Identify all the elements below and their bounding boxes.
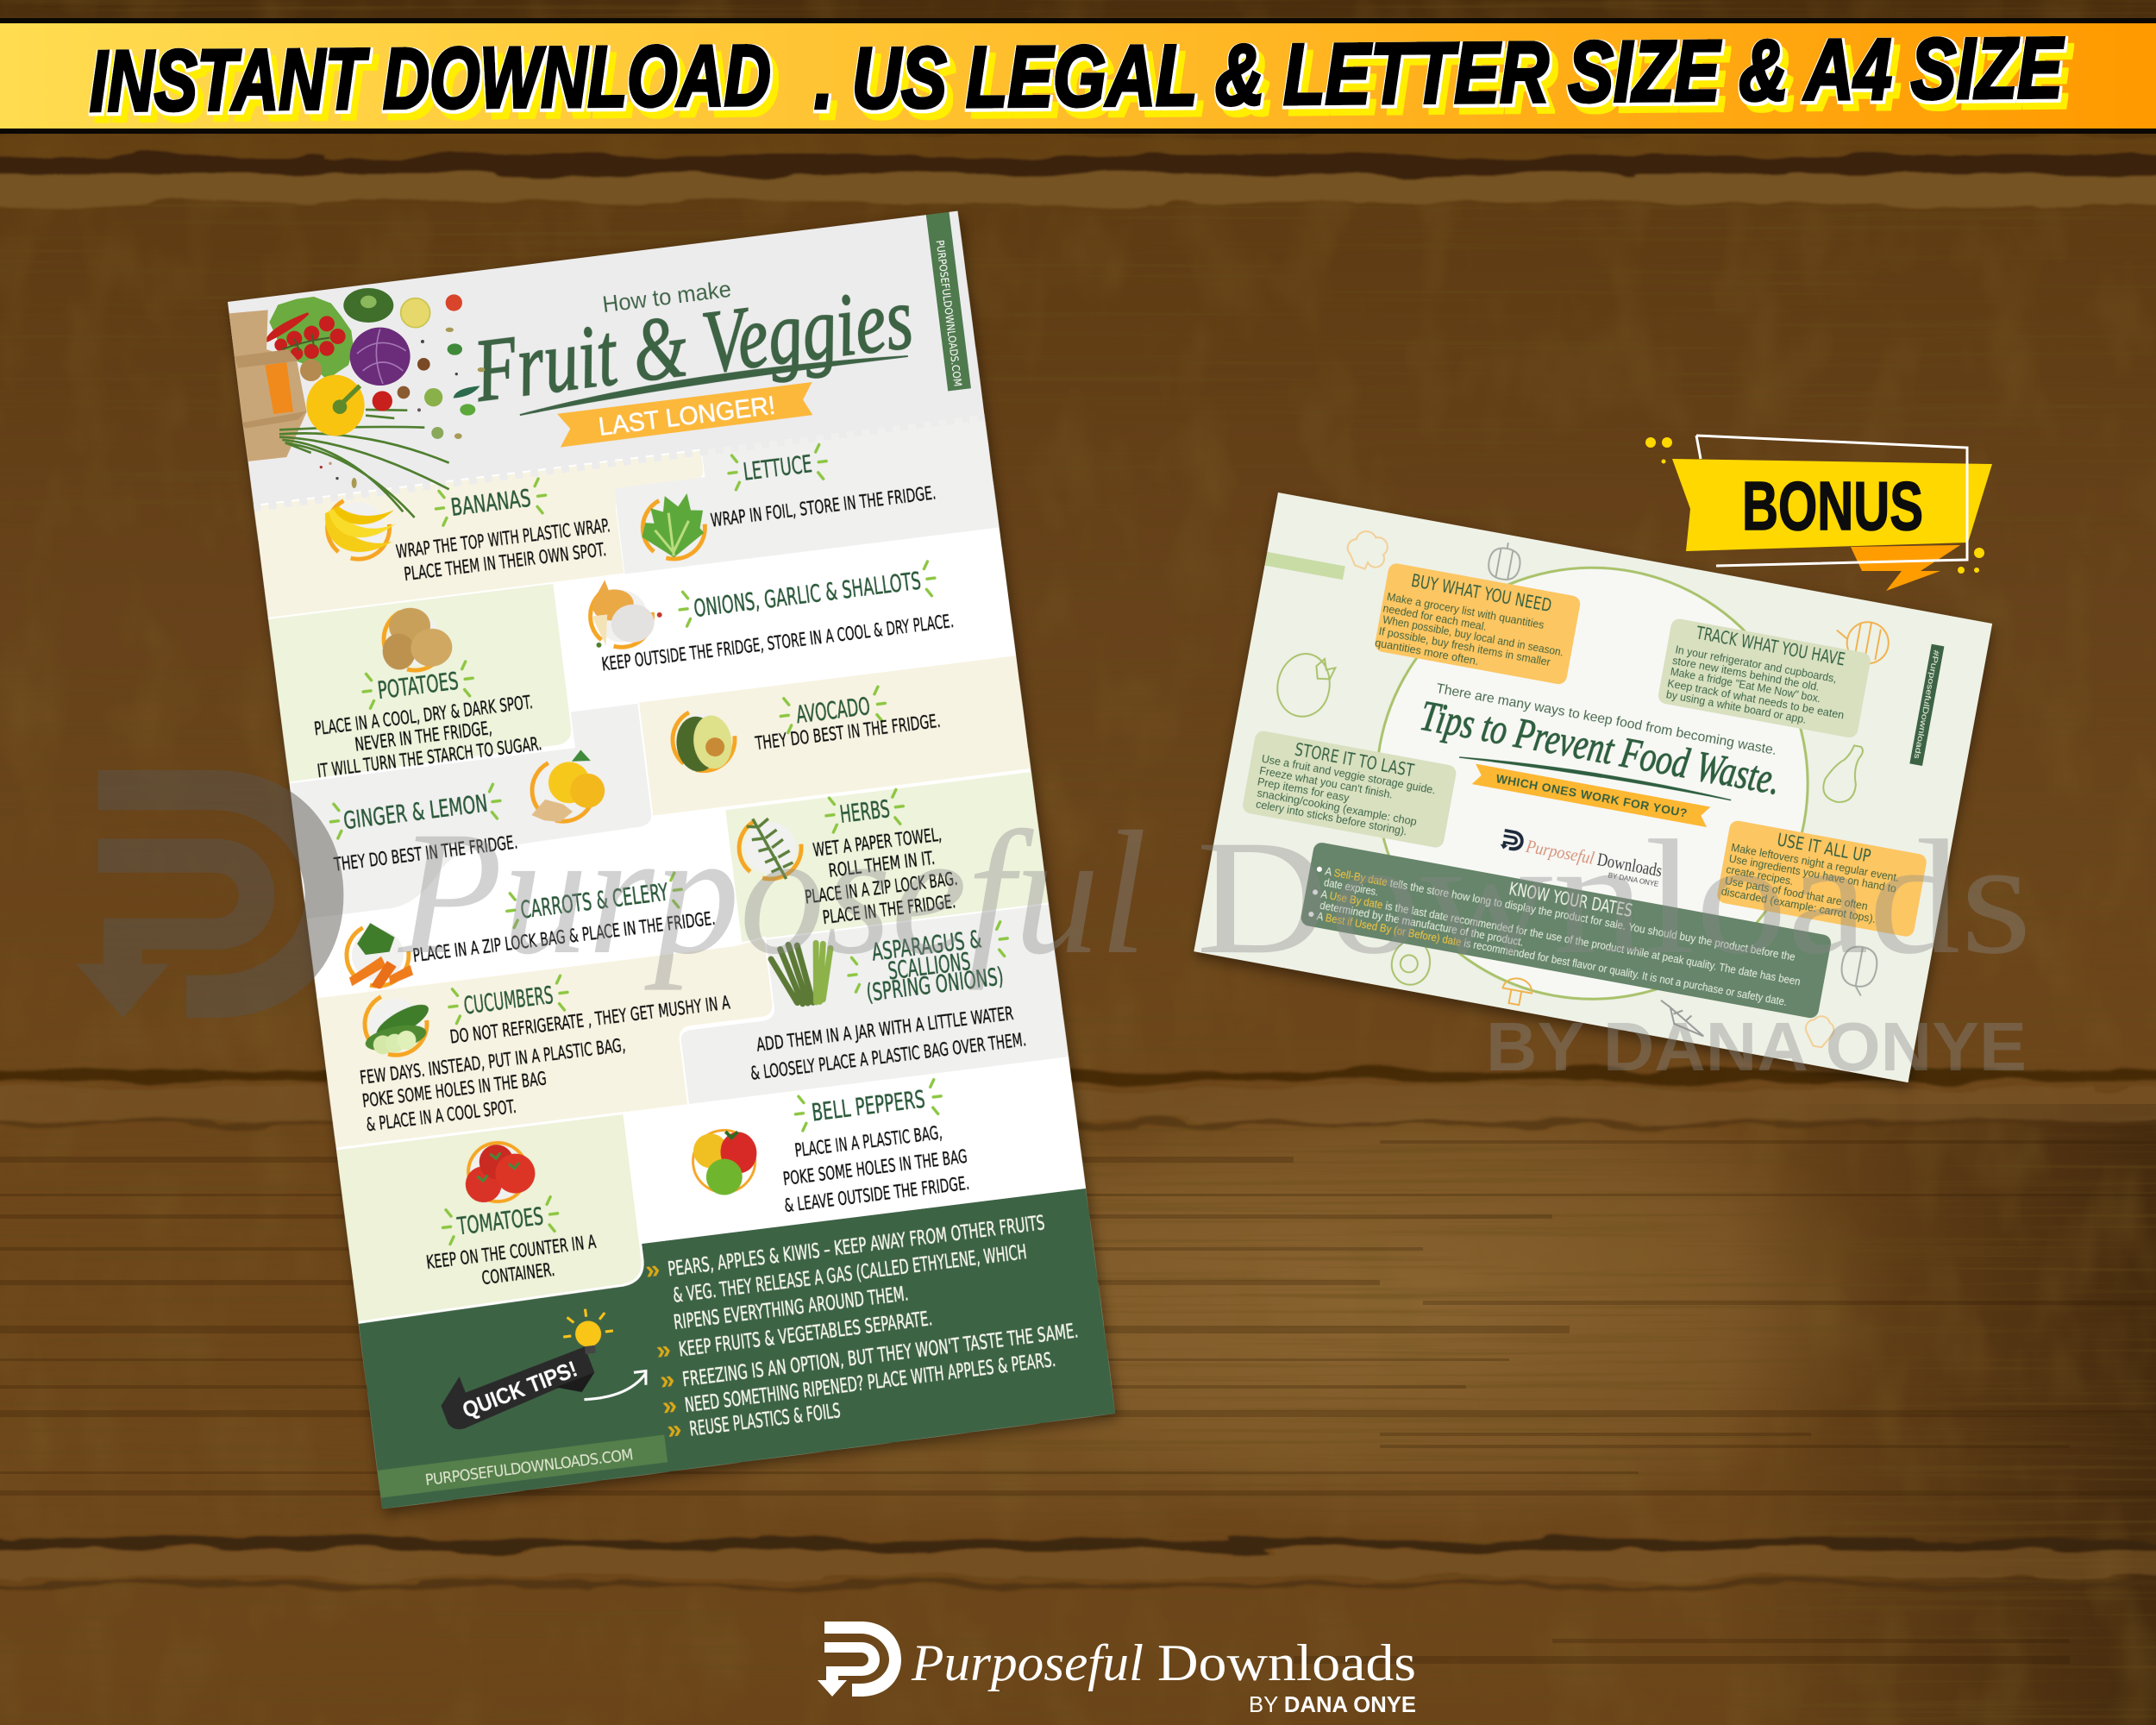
icon: avocado xyxy=(669,705,738,775)
card: know your dates: A Use By date is the last date recommended for the use of the product while at peak quality. The date has been xyxy=(1319,888,1802,988)
card: know your dates: determined by the manufacture of the product. xyxy=(1319,899,1525,949)
panel: lettuce: LETTUCE xyxy=(742,449,813,486)
top banner xyxy=(0,18,2156,134)
panel: carrots and celery: PLACE IN A ZIP LOCK BAG & PLACE IN THE FRIDGE. xyxy=(411,908,717,966)
icon: bell peppers xyxy=(689,1126,761,1199)
panel: potatoes: NEVER IN THE FRIDGE, xyxy=(354,718,493,756)
panel: onions garlic shallots: KEEP OUTSIDE THE FRIDGE, STORE IN A COOL & DRY PLACE. xyxy=(600,611,955,675)
small logo: Purposeful xyxy=(1524,836,1596,869)
panel: lettuce xyxy=(611,413,1012,574)
card: buy what you need: needed for each meal. xyxy=(1382,601,1488,633)
broccoli xyxy=(343,288,393,323)
card: store it to last: snacking/cooking (example: chop xyxy=(1256,786,1418,828)
ribbon: quick tips: QUICK TIPS! xyxy=(459,1356,580,1423)
lettuce xyxy=(269,297,354,380)
panel: avocado: THEY DO BEST IN THE FRIDGE. xyxy=(754,711,942,754)
small logo: Downloads xyxy=(1595,849,1664,881)
circle xyxy=(1341,532,1843,1034)
panel: bell peppers: PLACE IN A PLASTIC BAG, xyxy=(793,1122,943,1161)
panel: carrots and celery: CARROTS & CELERY xyxy=(519,877,670,924)
sheet: tips to prevent food waste xyxy=(1194,492,1992,1082)
quick tips list: » xyxy=(658,1365,676,1395)
quick tips list: PEARS, APPLES & KIWIS – KEEP AWAY FROM OTHER FRUITS xyxy=(667,1212,1046,1281)
panel: asparagus and scallions: ADD THEM IN A JAR WITH A LITTLE WATER xyxy=(755,1003,1014,1056)
hashtag strip xyxy=(1909,644,1944,766)
panel: bell peppers: BELL PEPPERS xyxy=(810,1084,926,1126)
panel: onions garlic shallots: ONIONS, GARLIC & SHALLOTS xyxy=(693,566,923,623)
script title: Fruit & Veggies xyxy=(468,268,918,421)
card: track what you have xyxy=(1657,618,1871,739)
hashtag strip: #PurposefulDownloads xyxy=(1912,649,1940,760)
icon: cucumbers xyxy=(359,988,437,1059)
ribbon: quick tips xyxy=(434,1331,599,1441)
banner text xyxy=(89,20,2065,129)
panel: herbs: PLACE IN A ZIP LOCK BAG. xyxy=(804,869,959,907)
panel: bananas xyxy=(253,449,716,618)
swoosh xyxy=(1459,748,1732,807)
card: know your dates xyxy=(1300,841,1833,1019)
lime xyxy=(401,298,430,328)
icon: bananas xyxy=(323,492,400,563)
wood streaks xyxy=(0,1140,2156,1664)
quick tips list: REUSE PLASTICS & FOILS xyxy=(688,1400,842,1441)
panel: bell peppers: POKE SOME HOLES IN THE BAG xyxy=(782,1146,968,1189)
panel: potatoes: IT WILL TURN THE STARCH TO SUGAR. xyxy=(317,733,543,781)
panel: potatoes: PLACE IN A COOL, DRY & DARK SPOT. xyxy=(313,692,534,739)
quick tips list: KEEP FRUITS & VEGETABLES SEPARATE. xyxy=(678,1308,934,1362)
intro line: There are many ways to keep food from becoming waste. xyxy=(1435,681,1777,758)
panel: asparagus and scallions: SCALLIONS xyxy=(887,947,972,985)
icon: carrots and celery xyxy=(343,919,415,993)
cherry tomato xyxy=(446,294,462,311)
panel: bananas: WRAP THE TOP WITH PLASTIC WRAP. xyxy=(395,515,611,562)
card: use it all up xyxy=(1716,819,1927,938)
card: store it to last: Prep items for easy xyxy=(1257,775,1351,805)
card: store it to last xyxy=(1241,730,1457,849)
red cabbage xyxy=(350,328,411,386)
bonus badge xyxy=(1645,436,1992,591)
icon: ginger and lemon xyxy=(524,748,608,825)
ribbon: which ones xyxy=(1472,764,1710,827)
watermark logo xyxy=(76,770,343,1018)
quick tips list: » xyxy=(644,1255,661,1285)
card: use it all up: USE IT ALL UP xyxy=(1776,829,1872,867)
panel: bananas: PLACE THEM IN THEIR OWN SPOT. xyxy=(403,539,607,585)
card: use it all up: discarded (example: carrot tops). xyxy=(1720,885,1877,925)
panel: asparagus and scallions: (SPRING ONIONS) xyxy=(865,962,1006,1007)
watermark wordmark: BY DANA ONYE xyxy=(1486,1008,2027,1085)
yellow pepper xyxy=(306,375,365,436)
paper bag xyxy=(229,310,307,461)
card: buy what you need: When possible, buy local and in season. xyxy=(1382,612,1564,659)
quick tips list: & VEG. THEY RELEASE A GAS (CALLED ETHYLENE, WHICH xyxy=(672,1241,1028,1308)
panel: lettuce: WRAP IN FOIL, STORE IN THE FRIDGE. xyxy=(710,482,937,531)
card: track what you have: In your refrigerator and cupboards, xyxy=(1674,643,1838,685)
card: track what you have: Make a fridge "Eat Me Now" box. xyxy=(1670,665,1822,705)
panel: herbs: WET A PAPER TOWEL, xyxy=(812,825,943,861)
panel: ginger and lemon xyxy=(283,703,660,919)
panel: bell peppers xyxy=(624,1057,1094,1244)
panel: tomatoes: CONTAINER. xyxy=(480,1259,556,1289)
card: buy what you need: BUY WHAT YOU NEED xyxy=(1410,570,1553,616)
ribbon: last longer xyxy=(556,382,817,448)
watermark wordmark: Purposeful xyxy=(397,795,1147,991)
panel: herbs: PLACE IN THE FRIDGE. xyxy=(822,891,956,928)
panel: bananas: BANANAS xyxy=(449,483,532,522)
poster: fruit and veggies xyxy=(228,208,1132,1520)
card: store it to last: STORE IT TO LAST xyxy=(1293,739,1416,781)
side url strip: PURPOSEFULDOWNLOADS.COM xyxy=(934,240,964,387)
quick tips list: » xyxy=(661,1391,679,1421)
icon: asparagus xyxy=(769,939,837,1007)
watermark xyxy=(76,770,2032,1085)
card: store it to last: celery into sticks before storing). xyxy=(1255,797,1408,837)
chili xyxy=(266,313,308,341)
ribbon: which ones: WHICH ONES WORK FOR YOU? xyxy=(1495,771,1689,820)
card: know your dates: date expires. xyxy=(1323,875,1380,898)
swoosh xyxy=(518,351,909,415)
panel: asparagus and scallions: & LOOSELY PLACE A PLASTIC BAG OVER THEM. xyxy=(749,1029,1027,1084)
panel: tomatoes: KEEP ON THE COUNTER IN A xyxy=(425,1232,597,1273)
logo mark xyxy=(818,1622,901,1697)
card: buy what you need xyxy=(1374,562,1582,686)
icon: onion and garlic xyxy=(586,574,666,651)
wordmark: Purposeful xyxy=(911,1634,1144,1691)
panel: asparagus and scallions xyxy=(669,902,1078,1105)
panel: avocado xyxy=(638,654,1042,816)
card: track what you have: TRACK WHAT YOU HAVE xyxy=(1694,622,1846,670)
quick tips list: NEED SOMETHING RIPENED? PLACE WITH APPLES & PEARS. xyxy=(684,1349,1057,1417)
small logo: BY DANA ONYE xyxy=(1608,871,1659,888)
card: know your dates: A Best if Used By (or Before) date is recommended for best flavor or quality. It is not a purchase or safety date. xyxy=(1316,909,1788,1008)
panel: cucumbers xyxy=(314,938,784,1149)
card: store it to last: Freeze what you can't finish. xyxy=(1258,764,1394,801)
panel: ginger and lemon: GINGER & LEMON xyxy=(342,788,489,835)
bonus badge: BONUS xyxy=(1742,467,1923,544)
panel: carrots and celery xyxy=(342,869,718,993)
card: buy what you need: quantities more often. xyxy=(1374,636,1480,668)
arrow xyxy=(582,1371,649,1400)
green onions xyxy=(279,410,449,518)
panel: potatoes: POTATOES xyxy=(376,666,460,705)
card: buy what you need: If possible, buy fresh items in smaller xyxy=(1378,624,1552,668)
brand logo bottom xyxy=(818,1622,1416,1717)
panel: onions garlic shallots xyxy=(554,527,1028,712)
small logo xyxy=(1497,829,1664,888)
card: use it all up: Use parts of food that are often xyxy=(1724,874,1869,913)
watermark wordmark xyxy=(397,795,2032,1085)
card: know your dates: KNOW YOUR DATES xyxy=(1507,878,1634,921)
panel: tomatoes xyxy=(333,1113,646,1323)
poster paper xyxy=(228,208,1132,1517)
tag xyxy=(1264,552,1345,580)
card: know your dates: A Sell-By date tells the store how long to display the product for sale. You should buy the product before the xyxy=(1324,864,1796,963)
card: use it all up: Make leftovers night a regular event. xyxy=(1730,841,1901,884)
quick tips list xyxy=(644,1204,1086,1445)
panel: header xyxy=(228,208,1006,507)
icon: light bulb xyxy=(561,1306,616,1357)
url strip: PURPOSEFULDOWNLOADS.COM xyxy=(424,1446,635,1490)
watermark wordmark: Downloads xyxy=(1196,807,2032,988)
how to make: How to make xyxy=(601,276,732,317)
quick tips list: FREEZING IS AN OPTION, BUT THEY WON'T TASTE THE SAME. xyxy=(681,1320,1080,1391)
panel: cucumbers: & PLACE IN A COOL SPOT. xyxy=(365,1096,517,1135)
panel: asparagus and scallions: ASPARAGUS & xyxy=(870,925,983,966)
vegetable collage xyxy=(229,288,485,518)
panel: cucumbers: DO NOT REFRIGERATE , THEY GET MUSHY IN A xyxy=(448,992,731,1048)
panel: ginger and lemon: THEY DO BEST IN THE FRIDGE. xyxy=(332,831,518,875)
quick tips list: » xyxy=(666,1414,683,1445)
url strip xyxy=(373,1435,667,1498)
icon: lettuce xyxy=(637,492,709,562)
panel: footer green xyxy=(349,1186,1132,1520)
card: use it all up: Use ingredients you have on hand to xyxy=(1728,852,1897,895)
script heading: Tips to Prevent Food Waste. xyxy=(1417,691,1784,804)
serrated edge xyxy=(254,414,1006,508)
icon: herbs xyxy=(736,813,805,884)
card: buy what you need: Make a grocery list with quantities xyxy=(1386,590,1545,631)
brand logo bottom: BY DANA ONYE xyxy=(1249,1691,1416,1717)
panel: tomatoes: TOMATOES xyxy=(455,1201,545,1240)
quick tips list: RIPENS EVERYTHING AROUND THEM. xyxy=(673,1283,910,1334)
tomatoes and vine xyxy=(273,316,346,373)
panel: bell peppers: & LEAVE OUTSIDE THE FRIDGE. xyxy=(783,1173,970,1216)
ribbon: last longer: LAST LONGER! xyxy=(597,392,777,442)
walnut xyxy=(300,360,322,381)
panel: herbs: HERBS xyxy=(838,794,891,829)
scattered items xyxy=(320,328,485,488)
card: track what you have: Keep track of what needs to be eaten xyxy=(1666,676,1846,722)
quick tips list: » xyxy=(655,1335,673,1365)
icon: potatoes xyxy=(378,603,454,674)
banner text: INSTANT DOWNLOAD xyxy=(89,28,771,129)
icon: tomatoes xyxy=(461,1138,538,1206)
brand logo bottom: Downloads xyxy=(1157,1634,1416,1691)
panel: cucumbers: POKE SOME HOLES IN THE BAG xyxy=(361,1068,548,1112)
card: track what you have: store new items behind the old. xyxy=(1671,654,1821,693)
card: track what you have: by using a white board or app. xyxy=(1665,687,1808,726)
panel: potatoes xyxy=(267,583,574,786)
doodles xyxy=(1229,506,1940,1067)
side url strip xyxy=(926,212,971,392)
panel: avocado: AVOCADO xyxy=(794,692,872,729)
panel: cucumbers: CUCUMBERS xyxy=(462,981,555,1019)
panel: herbs: ROLL THEM IN IT. xyxy=(827,848,936,881)
panel: cucumbers: FEW DAYS. INSTEAD, PUT IN A PLASTIC BAG, xyxy=(359,1035,627,1088)
card: store it to last: Use a fruit and veggie storage guide. xyxy=(1261,752,1437,797)
panel: herbs xyxy=(725,770,1058,942)
card: use it all up: create recipes. xyxy=(1725,862,1795,888)
